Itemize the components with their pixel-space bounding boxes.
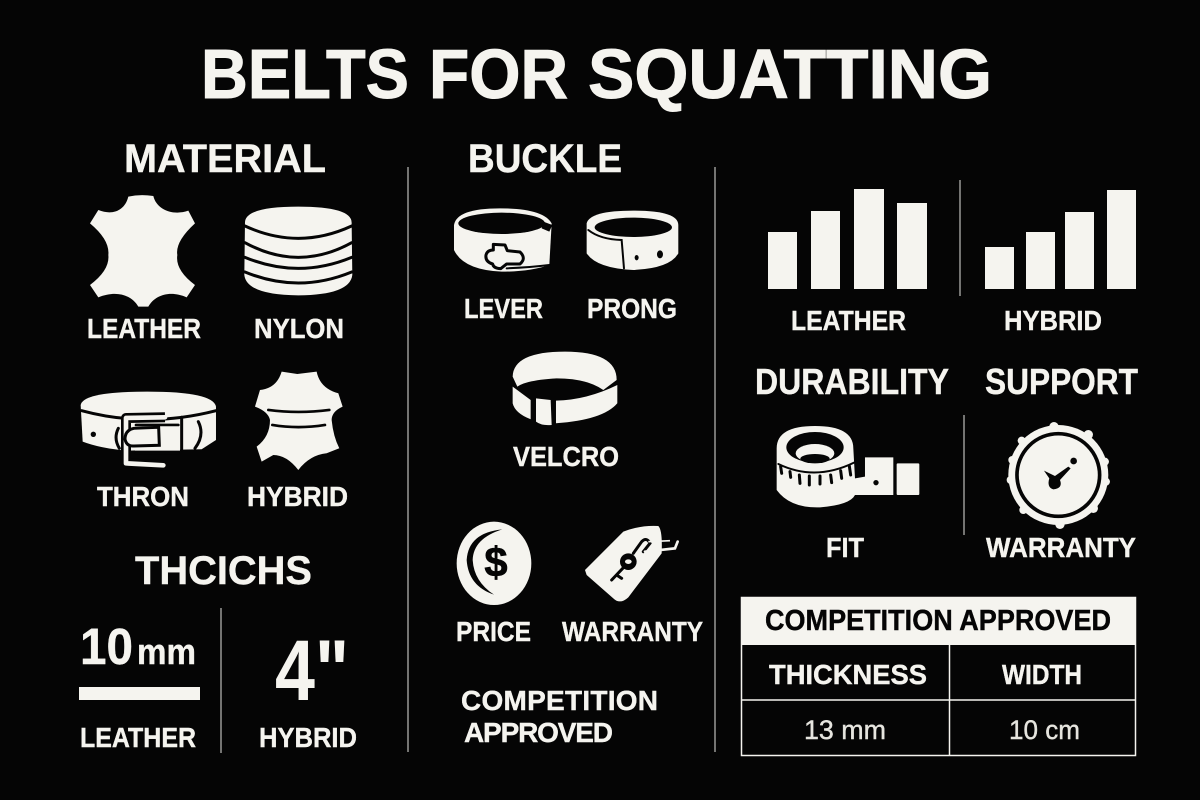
bar chart: leather — [768, 189, 927, 289]
label: nylon: NYLON — [254, 313, 344, 344]
label: thron: THRON — [97, 481, 189, 512]
label: price: PRICE — [456, 616, 531, 647]
icon: nylon stack — [244, 207, 352, 295]
table header: COMPETITION APPROVED — [765, 605, 1111, 637]
heading: support: SUPPORT — [985, 361, 1138, 402]
panel: material — [81, 137, 352, 512]
title — [201, 35, 992, 113]
label: hybrid: HYBRID — [247, 481, 348, 512]
heading: buckle: BUCKLE — [468, 137, 622, 181]
value: 10 mm: 10 — [80, 618, 133, 675]
panel: buckle — [454, 137, 703, 748]
label: leather: LEATHER — [791, 305, 906, 336]
cell: 13 mm: 13 mm — [804, 715, 886, 745]
label: hybrid: HYBRID — [1004, 305, 1102, 336]
title: SQUATTING — [588, 35, 992, 113]
column head: thickness: THICKNESS — [769, 659, 927, 690]
title: BELTS — [201, 35, 409, 113]
label: competition approved: APPROVED — [464, 717, 613, 748]
column head: width: WIDTH — [1002, 659, 1082, 690]
table: competition approved — [741, 597, 1136, 756]
unit: mm: mm — [137, 631, 196, 672]
icon: warranty clock badge — [1007, 422, 1110, 529]
label: prong: PRONG — [587, 293, 677, 324]
icon: price coin: $ — [484, 538, 508, 585]
bar: thickness sample — [79, 687, 200, 700]
label: competition approved: COMPETITION — [461, 685, 658, 716]
label: fit: FIT — [826, 532, 864, 563]
icon: hybrid hide — [255, 372, 343, 470]
icon: velcro belt — [513, 352, 617, 425]
label: warranty: WARRANTY — [562, 616, 703, 647]
label: competition approved — [461, 685, 658, 748]
value: 4 inch: 4" — [275, 623, 349, 719]
label: hybrid: HYBRID — [259, 722, 357, 753]
icon: prong belt — [587, 211, 678, 270]
panel: thickness — [79, 549, 357, 753]
icon: measuring tape — [777, 426, 919, 507]
table header — [741, 597, 1136, 645]
icon: belt with buckle — [81, 392, 216, 465]
icon: warranty tag with key — [585, 526, 678, 601]
title: FOR — [429, 35, 568, 113]
icon: lever belt — [454, 208, 552, 272]
label: leather: LEATHER — [87, 313, 201, 344]
heading: durability: DURABILITY — [755, 361, 949, 402]
bar chart: hybrid — [985, 190, 1136, 289]
heading: thcichs: THCICHS — [135, 549, 312, 593]
icon: price coin — [457, 522, 531, 605]
icon: leather hide — [90, 195, 195, 307]
label: leather: LEATHER — [80, 722, 196, 753]
cell: 10 cm: 10 cm — [1009, 715, 1080, 745]
label: lever: LEVER — [464, 293, 543, 324]
heading: material: MATERIAL — [124, 137, 326, 181]
label: warranty: WARRANTY — [986, 532, 1136, 563]
panel: ratings — [755, 180, 1138, 563]
label: velcro: VELCRO — [513, 441, 619, 472]
